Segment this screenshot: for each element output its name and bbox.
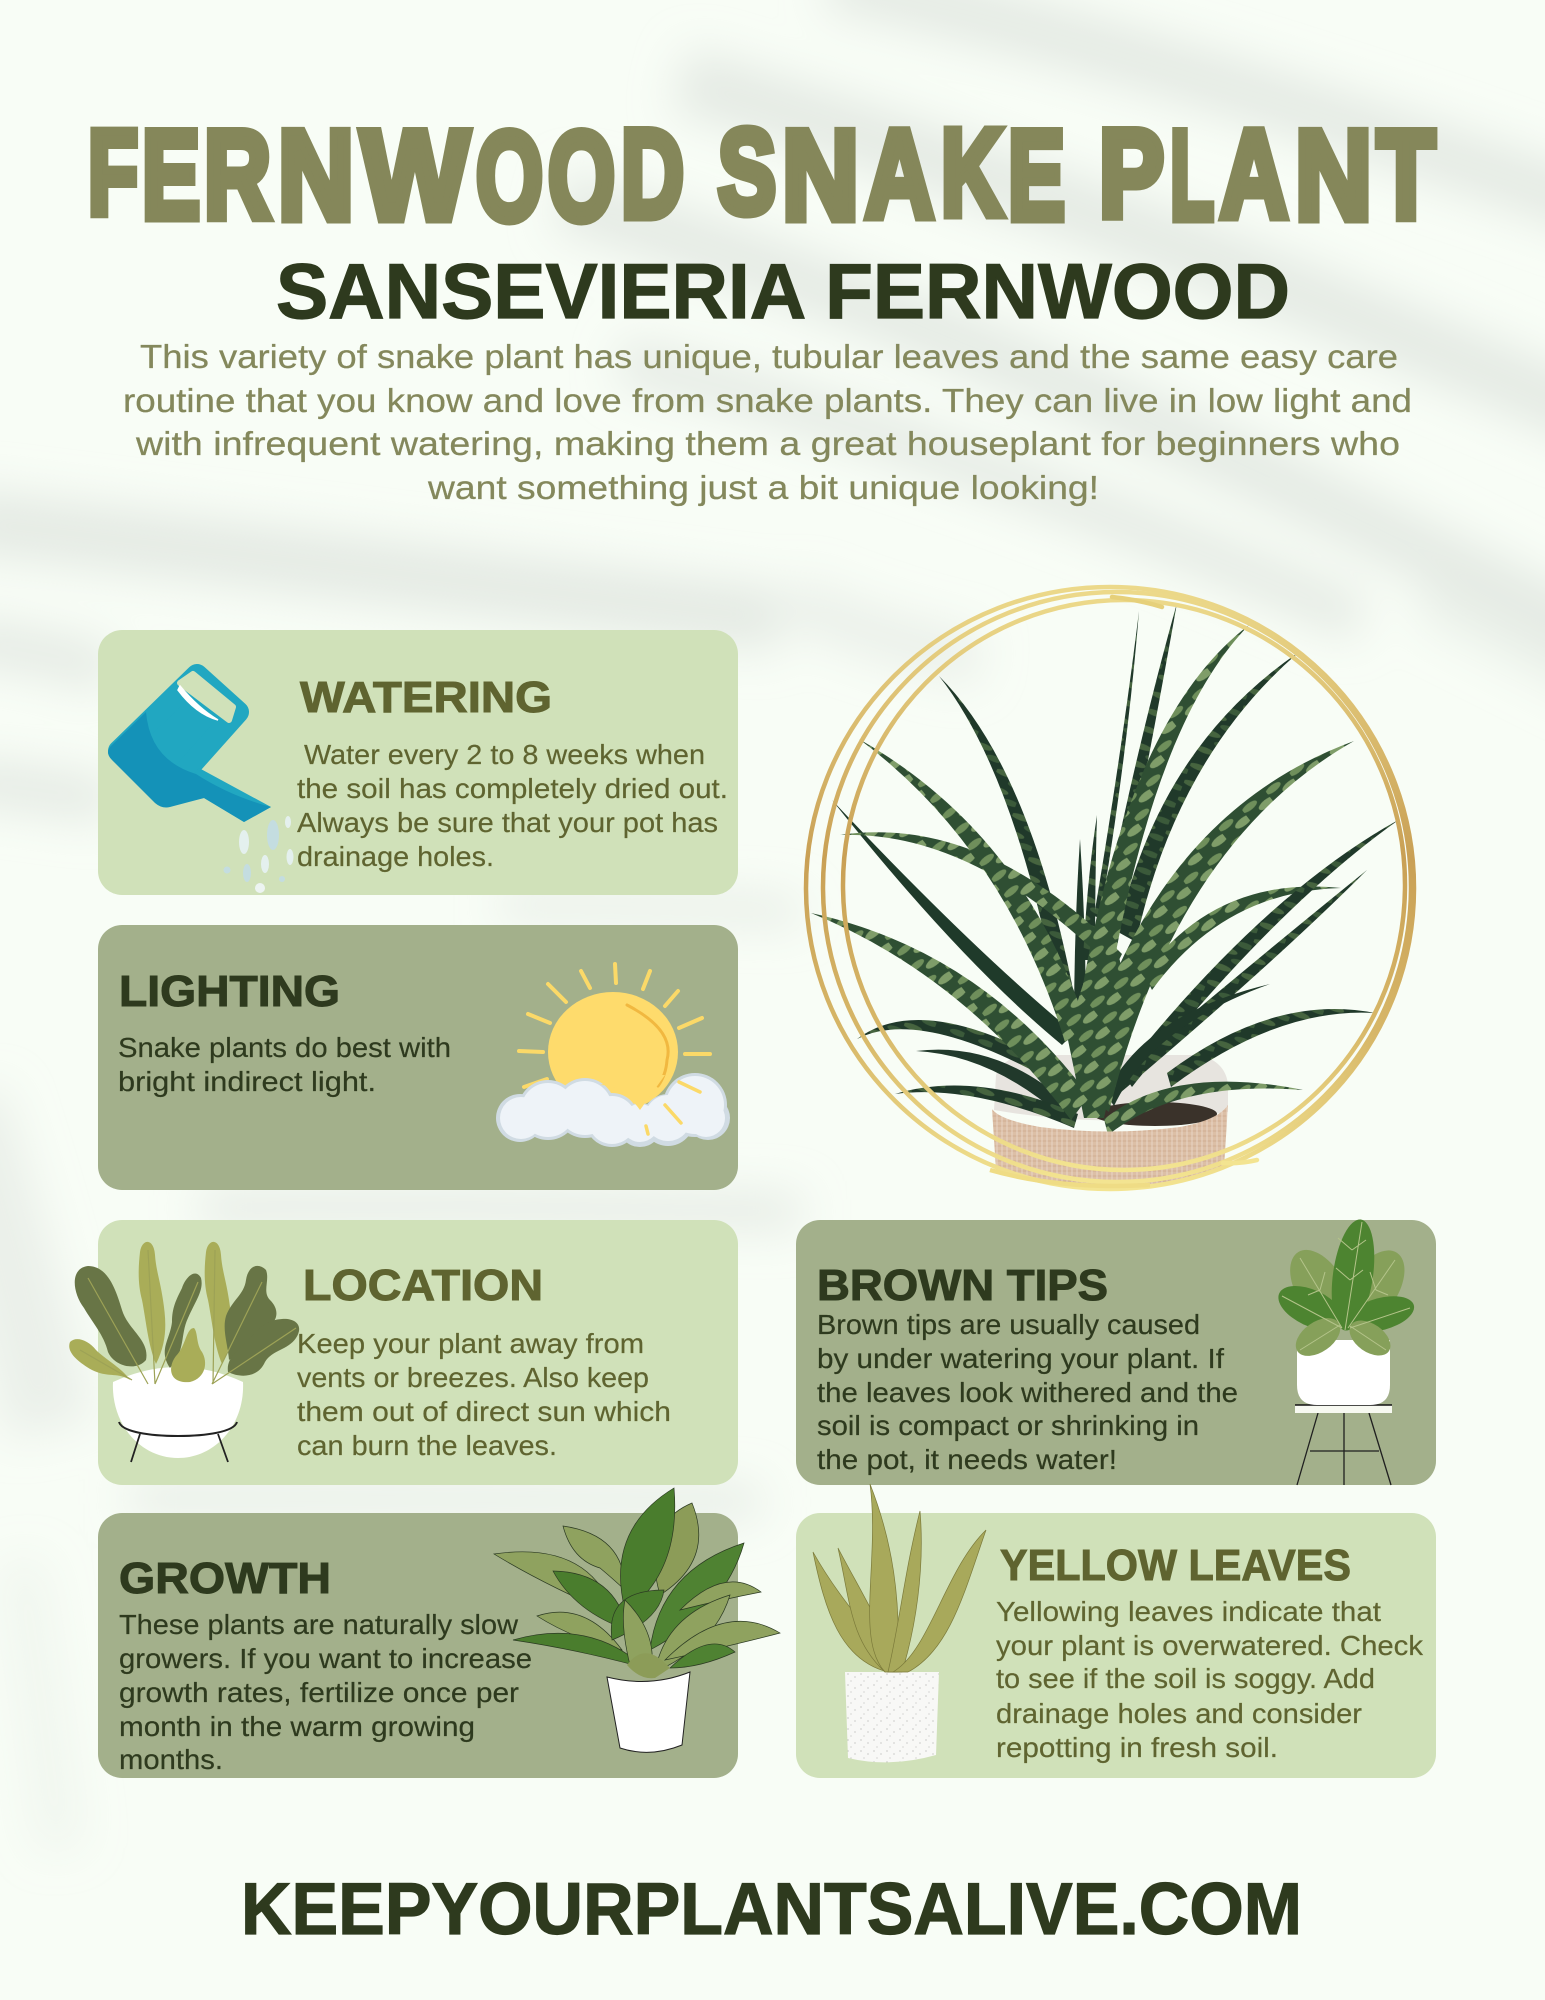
text: growth: These plants are naturally slow (119, 1609, 519, 1640)
text: yellow leaves: Yellowing leaves indicate that (996, 1596, 1381, 1627)
text: watering: Always be sure that your pot has (297, 807, 718, 838)
intro text: with infrequent watering, making them a great houseplant for beginners who (135, 425, 1400, 462)
text: yellow leaves: to see if the soil is soggy. Add (996, 1663, 1375, 1694)
plant leaves (811, 603, 1400, 1135)
text: lighting: bright indirect light. (118, 1066, 376, 1097)
text: watering: the soil has completely dried out. (297, 773, 728, 804)
intro text: routine that you know and love from snake plants. They can live in low light and (123, 382, 1412, 419)
text: lighting (118, 1032, 451, 1097)
title: N (782, 104, 859, 246)
title (88, 104, 1435, 247)
text: brown tips: soil is compact or shrinking in (817, 1410, 1199, 1441)
text: brown tips (817, 1309, 1238, 1475)
title: D (621, 105, 684, 244)
intro text: want something just a bit unique looking! (427, 469, 1099, 506)
text: growth: month in the warm growing (119, 1711, 475, 1742)
text: location: can burn the leaves. (297, 1430, 557, 1461)
text: watering: drainage holes. (297, 841, 494, 872)
icon: spiky potted plant (813, 1484, 986, 1762)
text: brown tips: Brown tips are usually caused (817, 1309, 1200, 1340)
text: growth: growth rates, fertilize once per (119, 1677, 519, 1708)
icon: leafy potted plant (494, 1488, 780, 1752)
title: W (361, 104, 469, 246)
panel: growth (98, 1488, 780, 1778)
text: growth: growers. If you want to increase (119, 1643, 532, 1674)
pot back wall (994, 1055, 1228, 1121)
text: location: vents or breezes. Also keep (297, 1362, 649, 1393)
title: E (142, 106, 200, 245)
subtitle: SANSEVIERIA FERNWOOD (276, 247, 1290, 335)
heading: brown tips: BROWN TIPS (817, 1261, 1108, 1310)
heading: location: LOCATION (303, 1261, 543, 1310)
text: brown tips: by under watering your plant. If (817, 1343, 1224, 1374)
title: T (1377, 106, 1435, 245)
text: yellow leaves: drainage holes and consider (996, 1698, 1362, 1729)
text: location: Keep your plant away from (297, 1328, 644, 1359)
soil (1093, 1102, 1217, 1126)
panel: brown tips (796, 1217, 1436, 1485)
panel: location (69, 1220, 738, 1485)
icon: plant on stool (1272, 1217, 1418, 1485)
panel: watering (98, 630, 738, 895)
hero: snake plant photo in gold rings (806, 587, 1414, 1189)
panel: yellow leaves (796, 1484, 1436, 1778)
text: location: them out of direct sun which (297, 1396, 671, 1427)
heading: yellow leaves: YELLOW LEAVES (1000, 1541, 1351, 1590)
panel: lighting (98, 925, 738, 1190)
title: A (1220, 105, 1288, 244)
burlap pot (992, 1105, 1228, 1188)
title: N (278, 104, 354, 246)
text: yellow leaves (996, 1596, 1424, 1763)
heading: lighting: LIGHTING (119, 967, 340, 1016)
title: N (1295, 104, 1372, 246)
text: yellow leaves: repotting in fresh soil. (996, 1732, 1278, 1763)
text: brown tips: the leaves look withered and the (817, 1377, 1238, 1408)
heading: watering: WATERING (300, 673, 552, 722)
icon: watering can (108, 674, 294, 893)
text: location (297, 1328, 671, 1461)
title: E (1008, 104, 1065, 246)
gold rings (806, 587, 1414, 1189)
text: lighting: Snake plants do best with (118, 1032, 451, 1063)
title: L (1170, 104, 1214, 246)
title: S (718, 105, 776, 239)
title: A (865, 105, 934, 244)
text: yellow leaves: your plant is overwatered. Check (996, 1630, 1424, 1661)
title: K (941, 105, 1003, 242)
title: F (88, 106, 138, 240)
heading: growth: GROWTH (119, 1554, 331, 1603)
title: O (548, 106, 615, 247)
footer url: KEEPYOURPLANTSALIVE.COM (241, 1869, 1302, 1950)
text: watering: Water every 2 to 8 weeks when (304, 739, 705, 770)
text: growth: months. (119, 1744, 223, 1775)
title: P (1099, 105, 1164, 243)
icon: potted plant with stand (69, 1242, 299, 1462)
icon: sun and cloud (496, 964, 730, 1147)
intro text (123, 338, 1412, 506)
title: R (204, 106, 271, 245)
text: brown tips: the pot, it needs water! (817, 1444, 1117, 1475)
text: watering (297, 739, 728, 872)
title: O (476, 106, 543, 247)
intro text: This variety of snake plant has unique, tubular leaves and the same easy care (140, 338, 1398, 375)
text: growth (119, 1609, 532, 1775)
